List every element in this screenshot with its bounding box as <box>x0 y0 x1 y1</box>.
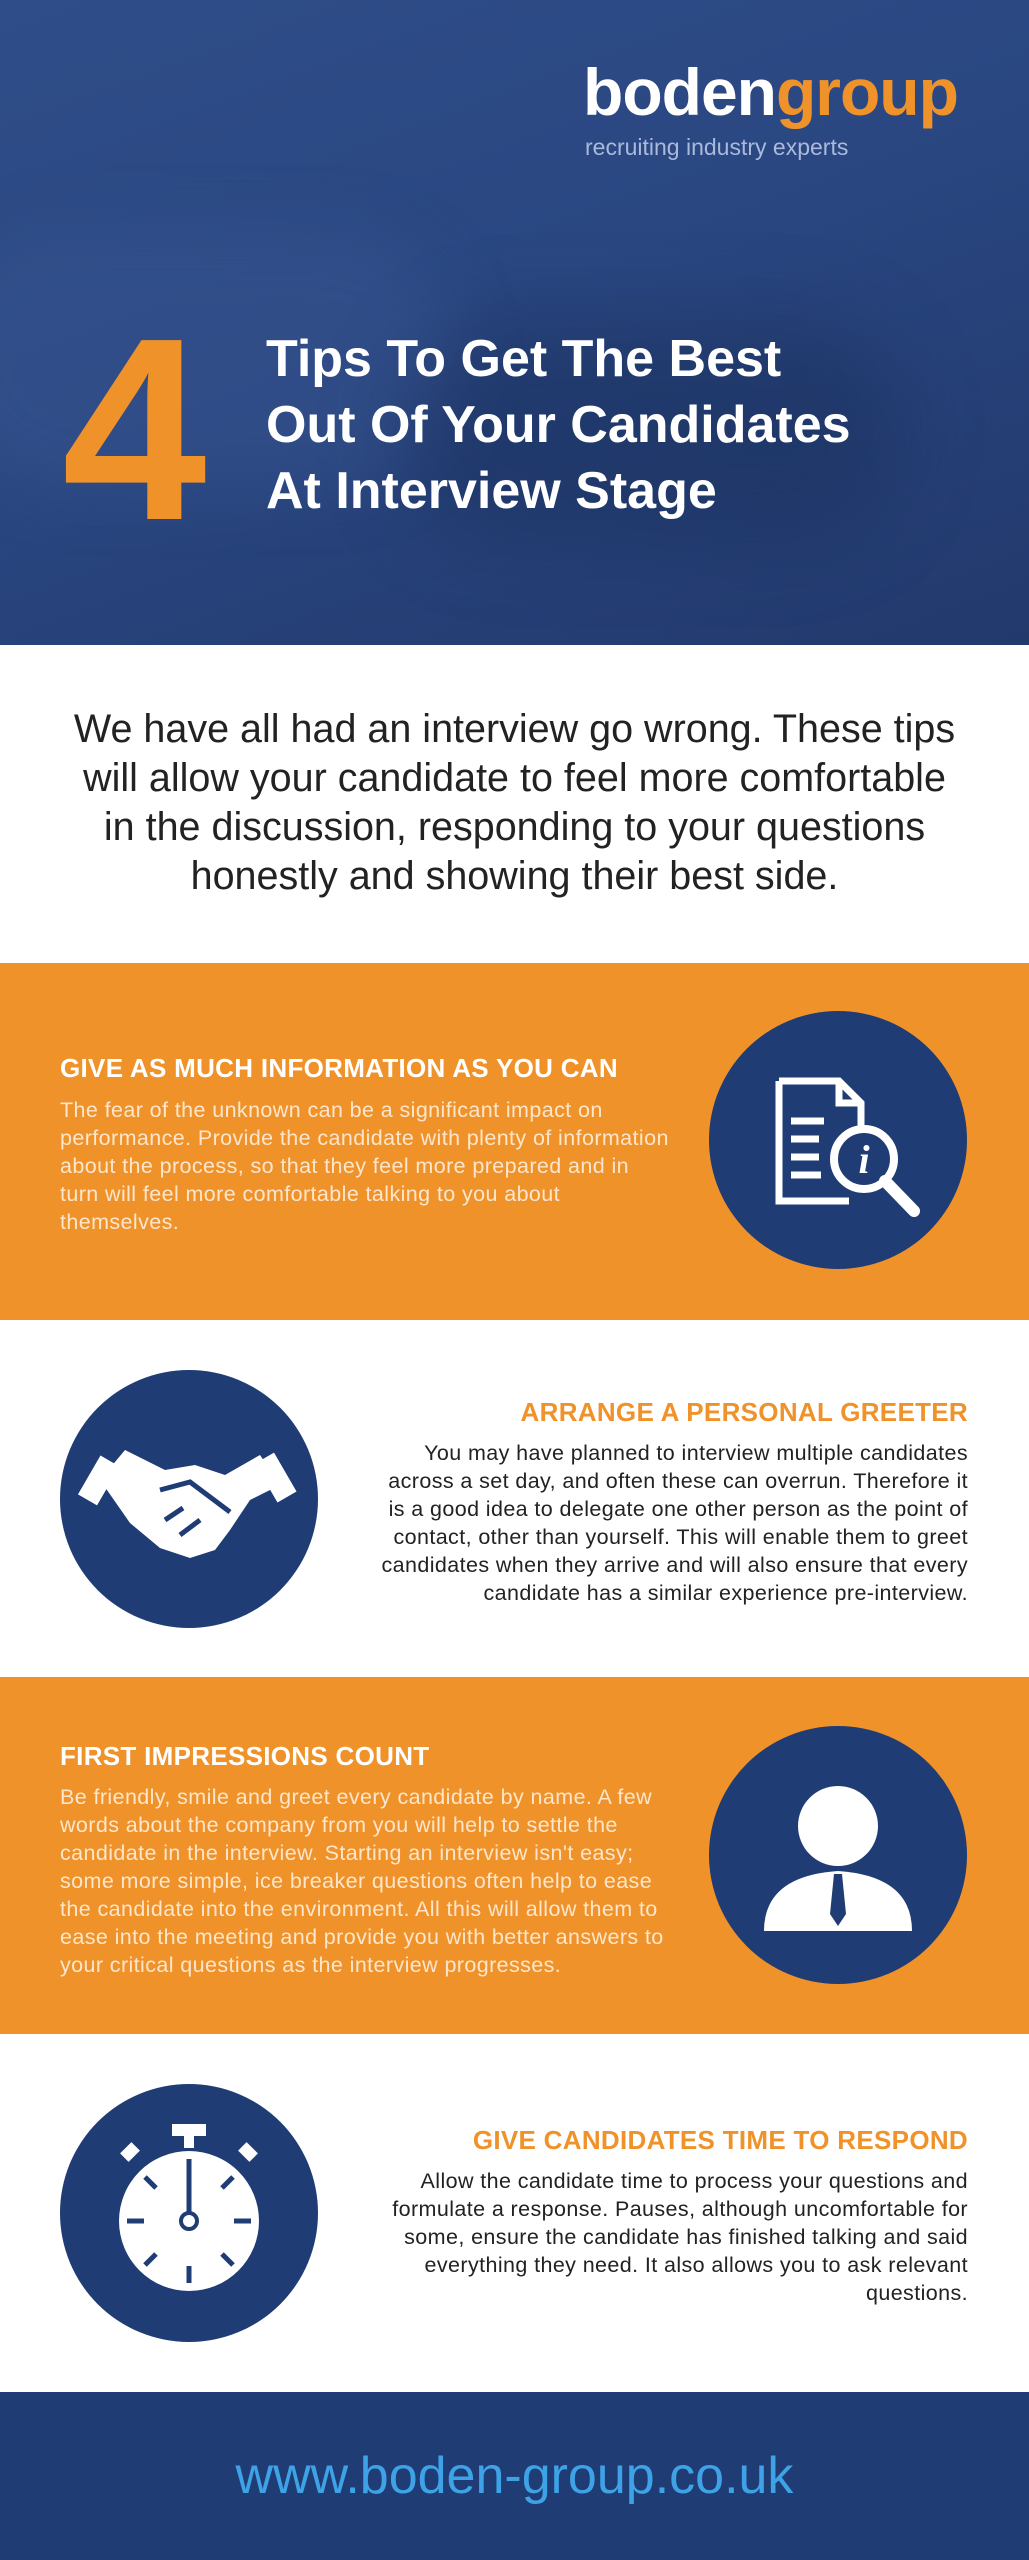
intro text: We have all had an interview go wrong. These tips <box>74 707 955 751</box>
icon: document magnifier: i <box>858 1137 870 1182</box>
icon: handshake <box>60 1370 318 1628</box>
intro text <box>74 707 955 898</box>
heading: ARRANGE A PERSONAL GREETER <box>521 1397 968 1427</box>
title: At Interview Stage <box>266 462 717 520</box>
intro text: will allow your candidate to feel more comfortable <box>83 756 946 800</box>
title: Out Of Your Candidates <box>266 396 851 454</box>
website url: www.boden-group.co.uk <box>236 2447 793 2505</box>
intro text: in the discussion, responding to your questions <box>104 805 925 849</box>
intro text: honestly and showing their best side. <box>191 854 838 898</box>
text: You may have planned to interview multiple candidates across a set day, and often these can overrun. Therefore it is a good idea to delegate one other person as the point of contact, other than yourself. This will enable them to greet candidates when they arrive and will also ensure that every candidate has a similar experience pre-interview. <box>382 1441 968 1605</box>
footer <box>0 2392 1029 2560</box>
heading: GIVE AS MUCH INFORMATION AS YOU CAN <box>60 1053 618 1083</box>
logo: recruiting industry experts <box>585 134 848 160</box>
title: Tips To Get The Best <box>266 330 781 388</box>
text: The fear of the unknown can be a significant impact on performance. Provide the candidate with plenty of information about the process, so that they feel more prepared and in turn will feel more comfortable talking to you about themselves. <box>60 1098 669 1234</box>
heading: FIRST IMPRESSIONS COUNT <box>60 1741 429 1771</box>
title <box>266 330 851 520</box>
logo: bodengroup <box>583 55 958 129</box>
big number 4: 4 <box>62 285 207 575</box>
header banner <box>0 0 1029 645</box>
icon: stopwatch <box>60 2084 318 2342</box>
icon: document magnifier <box>709 1011 967 1269</box>
heading: GIVE CANDIDATES TIME TO RESPOND <box>473 2125 968 2155</box>
panel: give information <box>0 963 1029 1320</box>
icon: person <box>709 1726 967 1984</box>
text: Be friendly, smile and greet every candidate by name. A few words about the company from you will help to settle the candidate in the interview. Starting an interview isn't easy; some more simple, ice breaker questions often help to ease the candidate into the environment. All this will allow them to ease into the meeting and provide you with better answers to your critical questions as the interview progresses. <box>60 1785 664 1977</box>
panel: first impressions <box>0 1677 1029 2034</box>
panel: time to respond <box>60 2084 968 2342</box>
panel: personal greeter <box>60 1370 968 1628</box>
text: Allow the candidate time to process your questions and formulate a response. Pauses, although uncomfortable for some, ensure the candidate has finished talking and said everything they need. It also allows you to ask relevant questions. <box>392 2169 968 2305</box>
